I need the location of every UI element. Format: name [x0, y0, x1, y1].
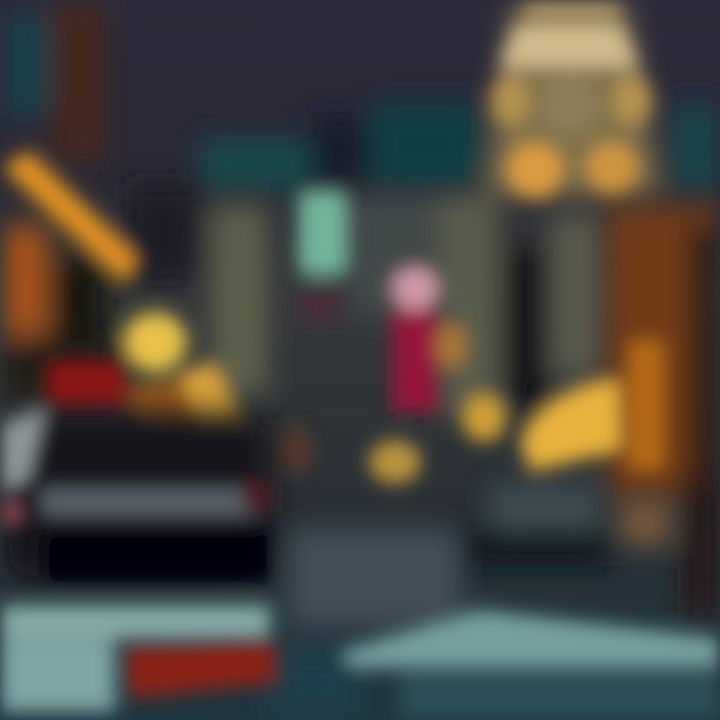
right building: orange wall	[608, 205, 720, 495]
left tower: dark orange structure	[0, 0, 120, 400]
street lights: warm glows	[277, 394, 506, 484]
banner: red and pink	[391, 266, 468, 412]
pedestrian right	[620, 480, 720, 620]
building: facade columns	[125, 185, 600, 415]
building: green roofs	[200, 105, 720, 190]
storefront glow	[520, 378, 622, 472]
foreground: right pale teal reflection	[340, 610, 720, 720]
car: left dark vehicle	[0, 405, 272, 584]
tower: illuminated	[483, 0, 662, 198]
foreground: left pale teal reflection	[0, 605, 270, 712]
red sign on left	[48, 362, 126, 406]
light beam: lower yellow glow	[115, 312, 254, 452]
light beam: upper orange diagonal	[2, 150, 140, 284]
foreground: red car stripe	[125, 642, 277, 698]
road surface	[270, 530, 460, 720]
traffic signal: green	[298, 190, 348, 323]
car: right vehicle	[460, 485, 610, 565]
